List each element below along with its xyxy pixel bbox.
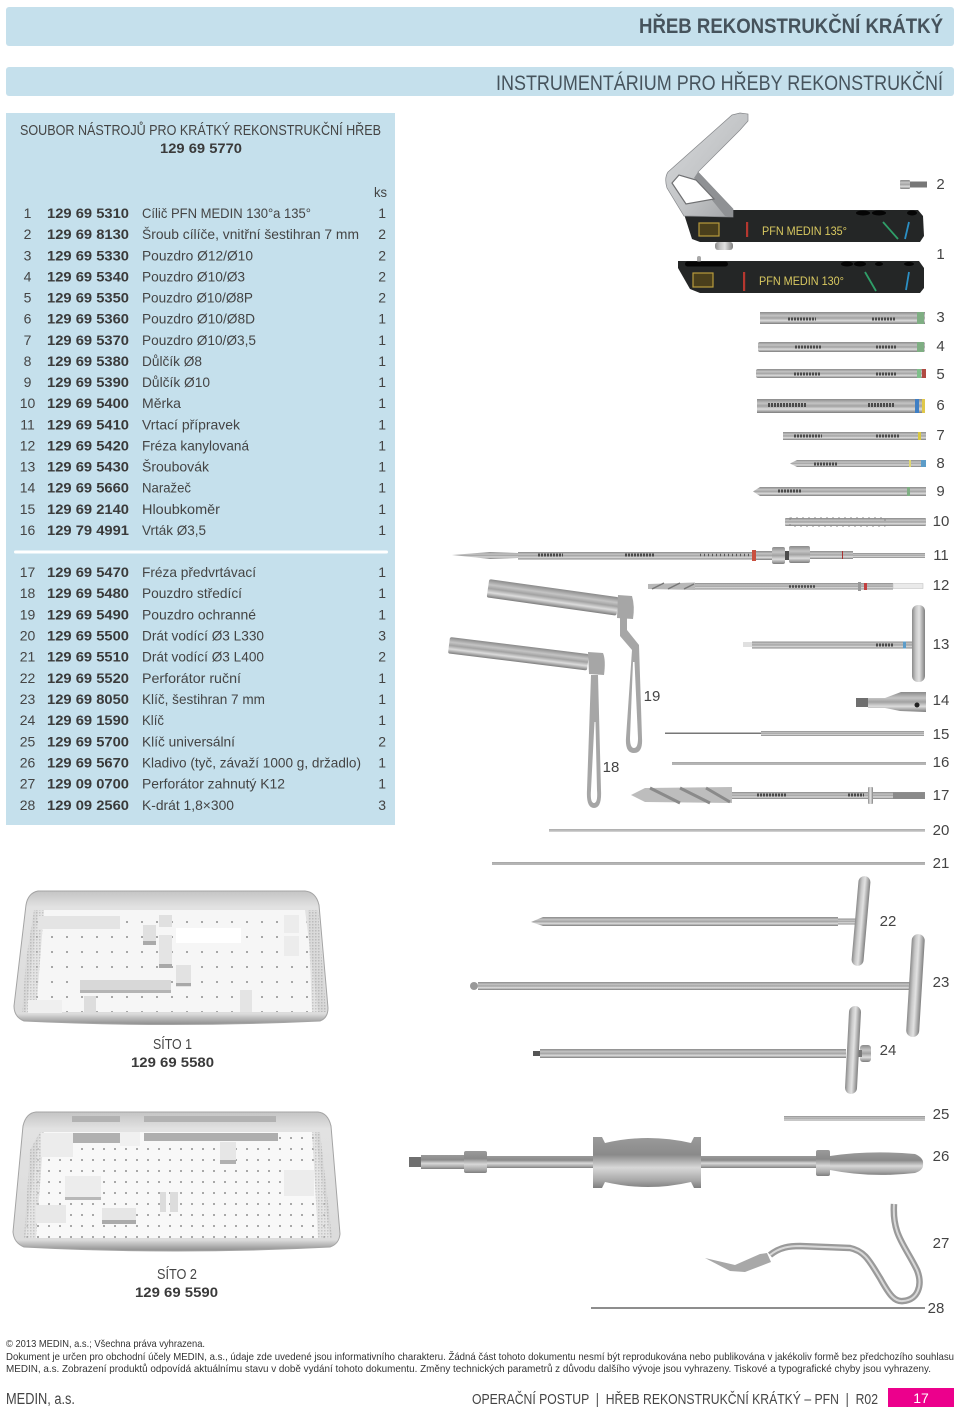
page number: 17 [913,1390,929,1406]
instrument 5: sleeve [756,369,926,378]
row 1: 129 69 5310 [47,205,129,221]
row 12: Fréza kanylovaná [142,437,249,453]
row 26 [20,754,386,770]
row 27: Perforátor zahnutý K12 [142,776,285,792]
row 15: 129 69 2140 [47,501,129,517]
row 7: Pouzdro Ø10/Ø3,5 [142,332,256,348]
legal notice: © 2013 MEDIN, a.s.; Všechna práva vyhrazena. [6,1338,205,1350]
row 14: 129 69 5660 [47,480,129,496]
row 10: 1 [378,395,386,411]
row 16: Vrták Ø3,5 [142,522,206,538]
row 14: Naražeč [142,480,191,496]
item number labels: 5 [936,366,945,383]
row 18: 1 [378,585,386,601]
item number labels: 7 [936,427,945,444]
tray 1 caption: SÍTO 1 [153,1036,192,1053]
row 3: 3 [24,247,32,263]
row 13: Šroubovák [142,458,210,474]
row 2: 2 [378,226,386,242]
instrument 3: sleeve [760,312,925,324]
row 1: Cílič PFN MEDIN 130°a 135° [142,205,311,221]
row 19: 19 [20,606,35,622]
item number labels: 27 [933,1235,949,1252]
row 13 [20,458,386,474]
page number [888,1388,954,1407]
item number labels: 18 [603,759,619,776]
row 2 [24,226,386,242]
row 4: Pouzdro Ø10/Ø3 [142,268,245,284]
row 16: 1 [378,522,386,538]
legal notice: MEDIN, a.s. Zobrazení produktů odpovídá aktuálnímu stavu v době vydání tohoto dokumentu. Změny technických parametrů z důvodu dalšího vývoje jsou vyhrazeny. Tiskové a typografické chyby jsou vyhrazeny. [6,1363,931,1375]
row 16 [20,522,386,538]
row 12: 1 [378,437,386,453]
row 22: 129 69 5520 [47,670,129,686]
row 15 [20,501,386,517]
row 16: 129 79 4991 [47,522,129,538]
instrument 16: drill [672,762,926,765]
row 6 [24,311,386,327]
instrument 11: drill guide [452,546,925,564]
instrument 25: universal wrench [784,1116,925,1120]
header band: main title [6,7,954,46]
row 28: 28 [20,797,35,813]
item number labels: 28 [928,1300,944,1317]
instrument 6: sleeve [757,399,925,413]
item number labels: 22 [880,913,896,930]
row 2: 2 [24,226,32,242]
row 19 [20,606,386,622]
row 21: Drát vodící Ø3 L400 [142,649,264,665]
item number labels: 25 [933,1106,949,1123]
row 23: 129 69 8050 [47,691,129,707]
item number labels: 6 [936,397,945,414]
instrument 4: sleeve [758,342,925,352]
row 6: 1 [378,311,386,327]
row 24: Klíč [142,712,164,728]
instrument 17: reamer [631,787,925,804]
row 6: 129 69 5360 [47,311,129,327]
footer company name: MEDIN, a.s. [6,1391,75,1408]
item number labels: 26 [933,1148,949,1165]
row 12: 129 69 5420 [47,437,129,453]
row 4: 129 69 5340 [47,268,129,284]
row 5: 2 [378,290,386,306]
row 1 [24,205,386,221]
table heading: 129 69 5770 [160,140,242,156]
row 15: 15 [20,501,35,517]
tray 1 caption [131,1036,214,1070]
footer document title: OPERAČNÍ POSTUP | HŘEB REKONSTRUKČNÍ KRÁTKÝ – PFN | R02 [472,1391,878,1408]
row 23: 23 [20,691,35,707]
row 1: 1 [378,205,386,221]
row 26: 129 69 5670 [47,754,129,770]
instrument 27: curved awl [705,1204,919,1301]
row 4: 2 [378,268,386,284]
row 3: 129 69 5330 [47,247,129,263]
row 27: 1 [378,776,386,792]
instrument 2: screw [900,180,927,189]
instrument 22: hand awl [531,876,871,966]
instrument 1: targeting devices: PFN MEDIN 135° [762,226,847,238]
row 26: 1 [378,754,386,770]
row 22: 1 [378,670,386,686]
row 17: 129 69 5470 [47,564,129,580]
row 10 [20,395,386,411]
item number labels: 2 [936,176,945,193]
table heading [20,121,381,156]
row 26: Kladivo (tyč, závaží 1000 g, držadlo) [142,754,361,770]
instrument 24: T-wrench [533,1006,871,1094]
row 27: 129 09 0700 [47,776,129,792]
row 28: 3 [378,797,386,813]
tray 2 [13,1112,340,1251]
row 18: Pouzdro středící [142,585,242,601]
row 7: 1 [378,332,386,348]
row 12: 12 [20,437,35,453]
row 17: Fréza předvrtávací [142,564,256,580]
item number labels: 16 [933,754,949,771]
item number labels: 19 [644,688,660,705]
row 19: 1 [378,606,386,622]
table heading: SOUBOR NÁSTROJŮ PRO KRÁTKÝ REKONSTRUKČNÍ HŘEB [20,121,381,139]
row 25: 2 [378,733,386,749]
row 24: 24 [20,712,35,728]
instrument 15: depth gauge [665,731,924,736]
row 5: 129 69 5350 [47,290,129,306]
row 8: 129 69 5380 [47,353,129,369]
row 22: 22 [20,670,35,686]
row 28: 129 09 2560 [47,797,129,813]
column header: quantity: ks [374,184,387,200]
row 20 [20,628,386,644]
row 3 [24,247,386,263]
row 8 [24,353,386,369]
instrument 26: slotted hammer [409,1137,923,1188]
row 17 [20,564,386,580]
row 11: 1 [378,416,386,432]
item number labels: 15 [933,726,949,743]
row 24: 1 [378,712,386,728]
row 14 [20,480,386,496]
row 7: 7 [24,332,32,348]
item number labels: 8 [936,455,945,472]
row 12 [20,437,386,453]
tray 2 caption [135,1266,218,1300]
instrument 1: targeting devices [666,113,924,293]
row 6: Pouzdro Ø10/Ø8D [142,311,255,327]
item number labels: 11 [933,547,949,564]
item number labels: 24 [880,1042,896,1059]
row 17: 17 [20,564,35,580]
row 22 [20,670,386,686]
row 20: 3 [378,628,386,644]
row 11 [20,416,386,432]
row 13: 1 [378,458,386,474]
row 5 [24,290,386,306]
tray 1 [14,891,328,1024]
row 10: 10 [20,395,35,411]
instrument 20: guide wire [549,829,925,832]
row 3: Pouzdro Ø12/Ø10 [142,247,253,263]
row 9: 9 [24,374,32,390]
row 21: 129 69 5510 [47,649,129,665]
row 9: 1 [378,374,386,390]
row 25: 25 [20,733,35,749]
row 24 [20,712,386,728]
instrument 14: impactor [856,692,926,712]
row 28 [20,797,386,813]
row 7 [24,332,386,348]
item number labels [603,176,949,1317]
item number labels: 3 [936,309,945,326]
row 22: Perforátor ruční [142,670,241,686]
row 14: 14 [20,480,35,496]
row 10: Měrka [142,395,181,411]
row 4: 4 [24,268,32,284]
tray 1 caption: 129 69 5580 [131,1054,214,1070]
row 26: 26 [20,754,35,770]
tray 2 caption: 129 69 5590 [135,1284,218,1300]
row 25 [20,733,386,749]
item number labels: 17 [933,787,949,804]
row 21: 2 [378,649,386,665]
item number labels: 1 [936,246,945,263]
item number labels: 9 [936,483,945,500]
row 9: 129 69 5390 [47,374,129,390]
row 19: 129 69 5490 [47,606,129,622]
instrument 9: centre punch [753,487,926,496]
header band: subtitle [6,67,954,96]
item number labels: 14 [933,692,949,709]
row 13: 13 [20,458,35,474]
row 8: 8 [24,353,32,369]
item number labels: 23 [933,974,949,991]
instrument 8: centre punch [790,460,926,467]
instrument 23: T-wrench hex [470,934,925,1037]
row 5: 5 [24,290,32,306]
row 5: Pouzdro Ø10/Ø8P [142,290,253,306]
legal notice [6,1338,954,1375]
instrument 10: gauge [785,518,926,526]
row 27 [20,776,386,792]
row 2: Šroub cílíče, vnitřní šestihran 7 mm [142,226,359,242]
row 21 [20,649,386,665]
row 8: 1 [378,353,386,369]
row 11: 11 [20,416,35,432]
row 4 [24,268,386,284]
panel: instrument set table [6,113,395,825]
row 9: Důlčík Ø10 [142,374,210,390]
row 25: 129 69 5700 [47,733,129,749]
row 3: 2 [378,247,386,263]
row 20: 129 69 5500 [47,628,129,644]
item number labels: 12 [933,577,949,594]
row 8: Důlčík Ø8 [142,353,202,369]
row 13: 129 69 5430 [47,458,129,474]
row 17: 1 [378,564,386,580]
row 6: 6 [24,311,32,327]
row 24: 129 69 1590 [47,712,129,728]
row 11: Vrtací přípravek [142,416,241,432]
row 2: 129 69 8130 [47,226,129,242]
instrument 21: guide wire [492,862,925,865]
row 18 [20,585,386,601]
instrument 18: centering sleeve with handle [448,637,605,808]
row 18: 129 69 5480 [47,585,129,601]
row 15: 1 [378,501,386,517]
row 23 [20,691,386,707]
instrument 28: K-wire [591,1307,925,1309]
row 15: Hloubkoměr [142,501,220,517]
row 20: 20 [20,628,35,644]
row 9 [24,374,386,390]
row 1: 1 [24,205,32,221]
item number labels: 4 [936,338,945,355]
item number labels: 20 [933,822,949,839]
item number labels: 10 [933,513,949,530]
row 20: Drát vodící Ø3 L330 [142,628,264,644]
item number labels: 21 [933,855,949,872]
row 10: 129 69 5400 [47,395,129,411]
row 27: 27 [20,776,35,792]
row 16: 16 [20,522,35,538]
item number labels: 13 [933,636,949,653]
instrument 13: screwdriver [743,605,925,682]
row 21: 21 [20,649,35,665]
instrument 19: protective sleeve with handle [487,579,642,753]
row 14: 1 [378,480,386,496]
row 19: Pouzdro ochranné [142,606,256,622]
row 23: 1 [378,691,386,707]
instrument 12: cannulated reamer [648,582,923,591]
row 25: Klíč universální [142,733,235,749]
row 28: K-drát 1,8×300 [142,797,234,813]
instrument 1: targeting devices: PFN MEDIN 130° [759,276,844,288]
row 7: 129 69 5370 [47,332,129,348]
row 23: Klíč, šestihran 7 mm [142,691,265,707]
tray 2 caption: SÍTO 2 [157,1266,197,1283]
instrument 7: sleeve [783,432,926,440]
row 18: 18 [20,585,35,601]
row 11: 129 69 5410 [47,416,129,432]
